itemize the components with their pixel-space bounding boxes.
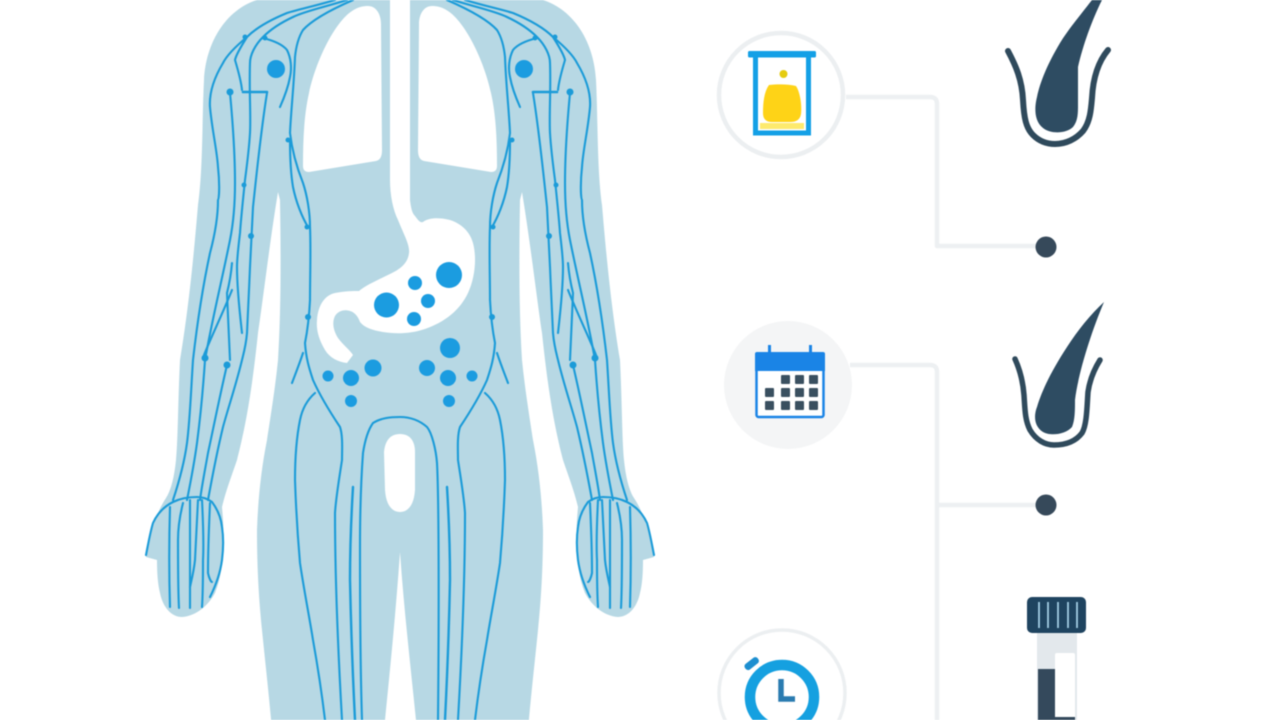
icon: beaker with yellow sample	[719, 33, 843, 157]
icon: sample tube	[1027, 597, 1086, 720]
dot marker: lower	[1036, 494, 1056, 516]
esophagus and stomach	[317, 0, 475, 363]
dot marker: upper	[1036, 236, 1056, 258]
body silhouette	[146, 0, 654, 720]
small vessel markers: right	[489, 34, 598, 368]
icon: hair follicle, lower	[1015, 302, 1104, 445]
lymph vessels: right side	[445, 0, 654, 720]
left lung	[303, 6, 382, 172]
connector: top icon to first dot	[846, 97, 1040, 246]
icon: calendar	[724, 321, 852, 449]
gap between legs	[385, 552, 416, 720]
lymph nodes in abdomen	[322, 262, 478, 407]
small vessel markers: left	[202, 34, 311, 368]
icon: stopwatch clock	[719, 630, 845, 720]
right lung	[418, 6, 497, 172]
pelvic opening	[384, 434, 415, 512]
connector: calendar icon to second dot and downward	[850, 365, 1040, 720]
icon: hair follicle, upper	[1008, 0, 1108, 144]
lymph vessels: left side	[146, 0, 439, 720]
